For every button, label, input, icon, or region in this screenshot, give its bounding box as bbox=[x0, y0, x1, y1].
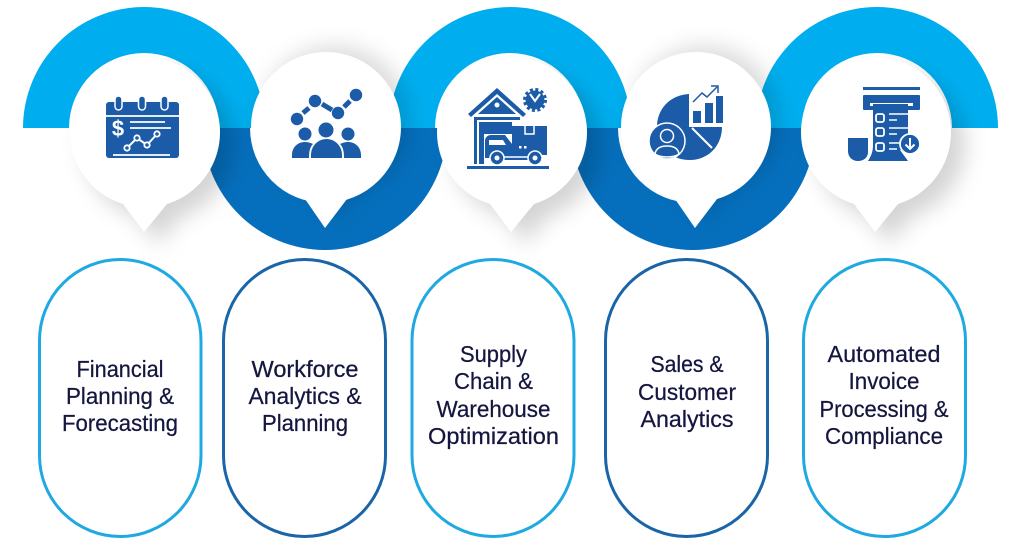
label: Automated Invoice Processing & Compliance: Invoice bbox=[848, 368, 920, 394]
label: Financial Planning & Forecasting: Planning & bbox=[66, 383, 174, 409]
label: Automated Invoice Processing & Compliance: Processing & bbox=[820, 396, 948, 422]
label: Workforce Analytics & Planning: Planning bbox=[262, 410, 348, 436]
balloon: automated invoice bbox=[801, 57, 951, 232]
icon: warehouse, truck and gear bbox=[467, 88, 549, 169]
label: Supply Chain & Warehouse Optimization: Warehouse bbox=[436, 396, 550, 422]
label: Automated Invoice Processing & Compliance: Compliance bbox=[825, 423, 943, 449]
card: workforce analytics bbox=[224, 260, 386, 536]
balloon: sales and customer analytics bbox=[621, 52, 771, 228]
label: Supply Chain & Warehouse Optimization bbox=[428, 341, 559, 449]
card: sales and customer analytics bbox=[606, 260, 768, 536]
label: Automated Invoice Processing & Compliance bbox=[820, 341, 948, 449]
label: Workforce Analytics & Planning bbox=[248, 356, 362, 436]
label: Financial Planning & Forecasting bbox=[62, 356, 178, 436]
icon: team with trend line bbox=[291, 89, 362, 158]
balloon: financial planning bbox=[70, 57, 220, 232]
label: Supply Chain & Warehouse Optimization: Supply bbox=[460, 341, 527, 367]
label: Workforce Analytics & Planning: Workforce bbox=[252, 356, 358, 382]
label: Financial Planning & Forecasting: Financial bbox=[76, 356, 164, 382]
label: Automated Invoice Processing & Compliance: Automated bbox=[828, 341, 940, 367]
icon: calendar with dollar sign and chart: $ bbox=[112, 116, 124, 141]
balloon: workforce analytics bbox=[251, 52, 401, 228]
label: Supply Chain & Warehouse Optimization: Chain & bbox=[454, 368, 533, 394]
balloon: supply chain bbox=[437, 57, 587, 232]
wave ribbon bbox=[23, 7, 998, 250]
icon: calendar with dollar sign and chart bbox=[106, 96, 179, 158]
card: supply chain bbox=[412, 260, 574, 536]
label: Financial Planning & Forecasting: Forecasting bbox=[62, 410, 178, 436]
card: automated invoice bbox=[804, 260, 966, 536]
card: financial planning bbox=[40, 260, 201, 536]
label: Sales & Customer Analytics: Customer bbox=[638, 379, 736, 405]
label: Sales & Customer Analytics: Analytics bbox=[640, 406, 734, 432]
label: Sales & Customer Analytics bbox=[638, 351, 736, 432]
icon: pie chart, customer and bars bbox=[649, 86, 723, 160]
label: Workforce Analytics & Planning: Analytics & bbox=[248, 383, 362, 409]
icon: invoice scroll with download bbox=[848, 87, 920, 161]
label: Supply Chain & Warehouse Optimization: Optimization bbox=[428, 423, 559, 449]
label: Sales & Customer Analytics: Sales & bbox=[650, 351, 724, 377]
